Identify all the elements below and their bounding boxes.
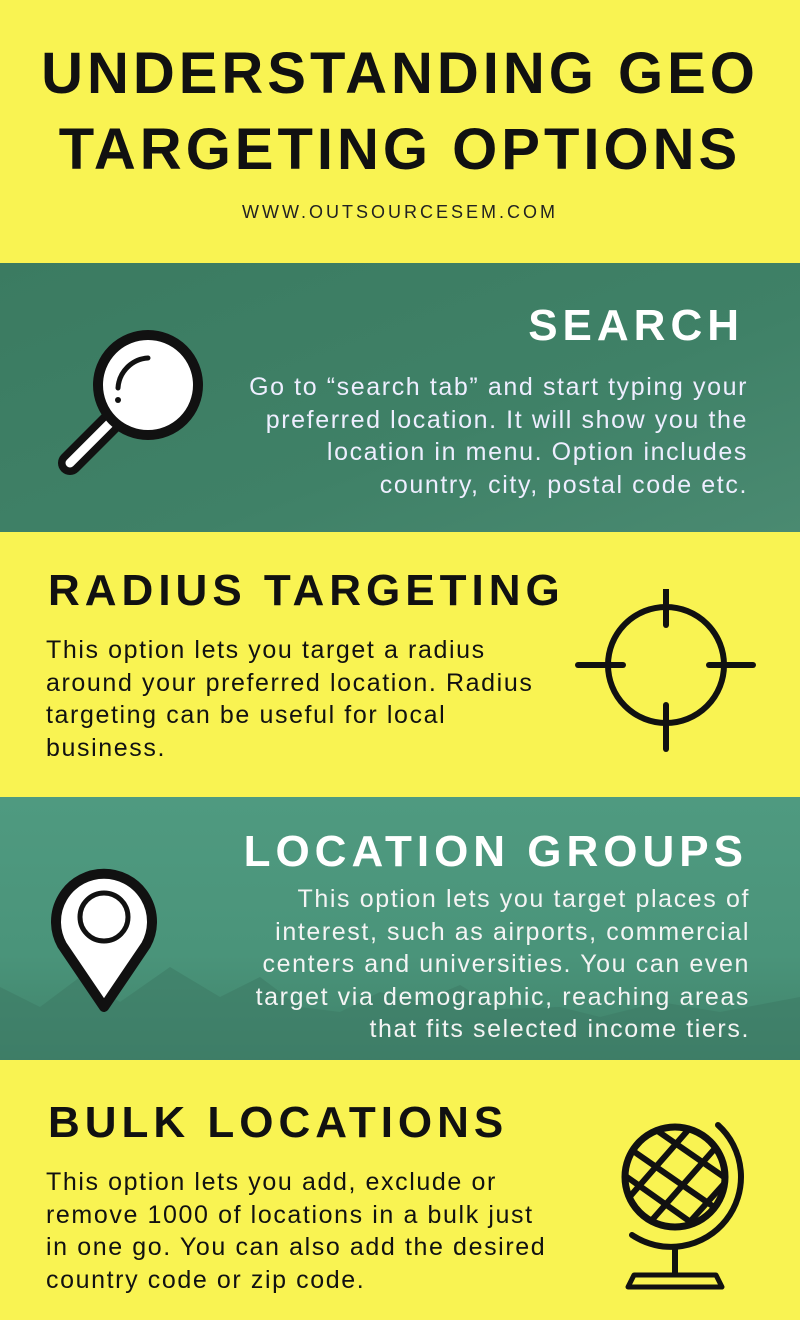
title — [41, 41, 759, 182]
title: TARGETING OPTIONS — [59, 117, 741, 182]
text: location groups: This option lets you target places of — [298, 885, 750, 913]
icon: map pin — [51, 868, 157, 1012]
text: location groups: centers and universities. You can even — [263, 950, 750, 978]
text: radius — [46, 636, 533, 762]
panel: location groups — [0, 797, 800, 1060]
icon: crosshair — [575, 589, 756, 752]
heading: radius targeting: RADIUS TARGETING — [48, 566, 565, 615]
text: radius: targeting can be useful for local — [46, 701, 446, 729]
text: location groups: interest, such as airports, commercial — [275, 918, 750, 946]
icon: globe — [622, 1122, 744, 1290]
text: search: location in menu. Option includes — [327, 438, 748, 466]
text: radius: business. — [46, 734, 166, 762]
icon: magnifier — [58, 330, 203, 475]
text: radius: around your preferred location. Radius — [46, 668, 533, 696]
text: bulk — [46, 1168, 546, 1294]
text: location groups: that fits selected income tiers. — [369, 1015, 750, 1043]
text: radius: This option lets you target a radius — [46, 636, 486, 664]
panel: bulk locations — [46, 1106, 744, 1293]
text: location groups: target via demographic, reaching areas — [256, 982, 750, 1010]
text: location groups — [256, 885, 750, 1043]
panel: search — [0, 263, 800, 532]
text: search — [249, 373, 748, 498]
text: search: Go to “search tab” and start typing your — [249, 373, 748, 401]
title: UNDERSTANDING GEO — [41, 41, 759, 106]
mountains decoration — [0, 967, 800, 1016]
text: bulk: country code or zip code. — [46, 1266, 365, 1294]
text: search: country, city, postal code etc. — [380, 470, 748, 498]
text: bulk: remove 1000 of locations in a bulk just — [46, 1200, 534, 1228]
text: search: preferred location. It will show you the — [266, 406, 748, 434]
heading: bulk locations: BULK LOCATIONS — [48, 1098, 508, 1147]
text: bulk: This option lets you add, exclude or — [46, 1168, 497, 1196]
heading: search: SEARCH — [528, 301, 744, 350]
header band — [0, 0, 800, 263]
text: bulk: in one go. You can also add the desired — [46, 1233, 546, 1261]
website url: WWW.OUTSOURCESEM.COM — [242, 202, 558, 222]
heading: location groups: LOCATION GROUPS — [244, 827, 748, 876]
panel: radius targeting — [0, 532, 800, 797]
